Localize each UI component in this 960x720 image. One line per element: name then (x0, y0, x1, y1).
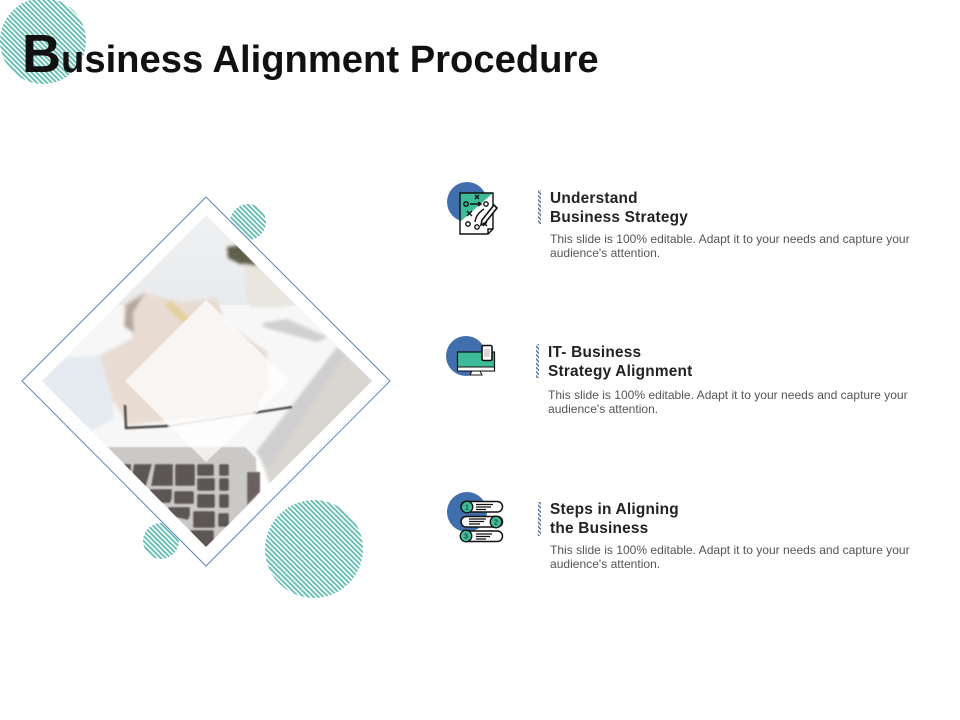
laptop screen (261, 354, 372, 484)
icon: strategy document (447, 182, 497, 234)
icon: numbered steps: 2 (494, 520, 498, 526)
item 1 text: This slide is 100% editable. Adapt it to your needs and capture your (550, 232, 910, 246)
decorative circle: top small (230, 204, 266, 240)
item 2 text (548, 388, 908, 416)
plant (227, 245, 260, 268)
phone (263, 319, 328, 342)
icon: numbered steps (447, 492, 502, 542)
title: Business Alignment Procedure (22, 24, 599, 84)
diamond photo (30, 205, 380, 550)
item 2 text: audience's attention. (548, 402, 658, 416)
item 1 heading: Business Strategy (550, 209, 688, 226)
notebook edge (125, 405, 292, 428)
keyboard keys (122, 464, 229, 548)
diamond outline (22, 197, 390, 566)
decorative circle: bottom large (265, 500, 363, 598)
item 2 heading: Strategy Alignment (548, 363, 692, 380)
accent bar 1 (538, 190, 541, 224)
item 2 heading: IT- Business (548, 344, 641, 361)
item 2 heading (548, 344, 692, 380)
item 1 text: audience's attention. (550, 246, 660, 260)
accent bar 3 (538, 502, 541, 536)
laptop base (108, 446, 258, 539)
item 3 heading: the Business (550, 520, 648, 537)
item 1 text (550, 232, 910, 260)
item 1 heading: Understand (550, 190, 638, 207)
item 3 text: This slide is 100% editable. Adapt it to your needs and capture your (550, 543, 910, 557)
accent bar 2 (536, 344, 539, 378)
pot (243, 264, 296, 307)
item 3 heading: Steps in Aligning (550, 501, 679, 518)
item 3 heading (550, 501, 679, 537)
decorative circle: bottom small (143, 523, 179, 559)
item 2 text: This slide is 100% editable. Adapt it to your needs and capture your (548, 388, 908, 402)
translucent diamond (125, 300, 270, 462)
item 1 heading (550, 190, 688, 226)
icon: devices (446, 336, 494, 376)
sleeve (40, 355, 113, 431)
icon: numbered steps: 1 (465, 504, 469, 512)
icon: numbered steps: 3 (464, 534, 468, 540)
item 3 text (550, 543, 910, 571)
hand and arm (100, 292, 268, 425)
item 3 text: audience's attention. (550, 557, 660, 571)
decorative circle: title (0, 0, 86, 84)
